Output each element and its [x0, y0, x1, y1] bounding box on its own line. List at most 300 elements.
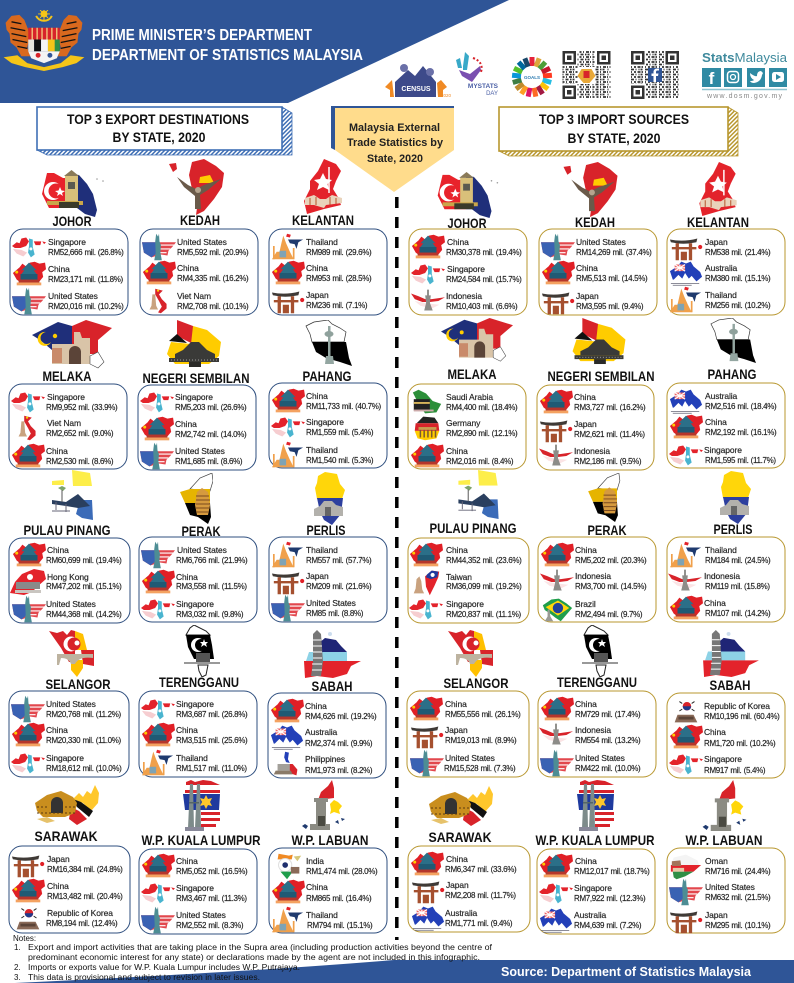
map: W.P. Kuala Lumpur import: [577, 780, 614, 831]
row: China: RM2,016 mil. (8.4%): [446, 457, 514, 466]
row: Indonesia: RM554 mil. (13.2%): [575, 736, 641, 745]
map: Pulau Pinang export: [52, 470, 93, 520]
row: China: RM44,352 mil. (23.6%): [446, 556, 522, 565]
row: China: [13, 543, 122, 566]
row: United States: RM632 mil. (21.5%): [705, 893, 771, 902]
row: China: [670, 596, 771, 619]
logo: MyStats Day: [456, 52, 499, 97]
row: Japan: RM295 mil. (10.1%): [705, 921, 771, 930]
panel: Kelantan imports: [667, 229, 785, 315]
row: China: RM23,171 mil. (11.8%): [48, 275, 124, 284]
map: Sabah export: [304, 630, 361, 678]
map: Melaka export: [32, 320, 112, 368]
panel: Sarawak exports: [9, 846, 130, 933]
row: Thailand: [272, 542, 372, 567]
state label: Sarawak import: SARAWAK: [428, 829, 492, 845]
state label: Perlis export: PERLIS: [306, 522, 346, 538]
map: Melaka import: [441, 318, 513, 361]
row: China: [410, 543, 522, 566]
row: China: [542, 261, 648, 284]
row: Singapore: Singapore: [175, 392, 213, 402]
row: Germany: Germany: [446, 418, 481, 428]
row: Australia: Australia: [705, 391, 738, 401]
row: Australia: [540, 909, 642, 932]
map: Selangor export: [49, 630, 94, 677]
row: China: China: [177, 263, 199, 273]
row: Japan: RM538 mil. (21.4%): [705, 248, 771, 257]
row: Singapore: [411, 264, 522, 284]
panel: Melaka imports: [408, 384, 526, 469]
row: United States: [12, 596, 122, 622]
row: China: [142, 854, 248, 877]
row: China: [670, 415, 777, 438]
row: China: China: [46, 725, 68, 735]
row: Thailand: [670, 287, 771, 312]
row: Japan: [542, 291, 644, 314]
panel: Negeri Sembilan imports: [537, 385, 654, 470]
row: Singapore: Singapore: [176, 883, 214, 893]
state label: Sarawak export: SARAWAK: [34, 828, 98, 844]
row: China: China: [704, 727, 726, 737]
row: Viet Nam: RM2,708 mil. (10.1%): [177, 302, 249, 311]
row: United States: RM5,592 mil. (20.9%): [177, 248, 249, 257]
row: Philippines: [274, 752, 373, 775]
row: Singapore: RM1,595 mil. (11.7%): [705, 456, 776, 465]
row: Oman: RM716 mil. (24.4%): [705, 867, 771, 876]
map: Kedah import: [563, 162, 618, 217]
map: W.P. Labuan import: [703, 780, 746, 831]
row: United States: United States: [306, 598, 356, 608]
panel: Perlis imports: [667, 537, 785, 622]
row: Singapore: Singapore: [447, 264, 485, 274]
state label: Pahang import: PAHANG: [708, 366, 757, 382]
row: Japan: RM3,595 mil. (9.4%): [576, 302, 644, 311]
row: Thailand: [142, 750, 247, 775]
row: United States: [410, 750, 516, 776]
row: Australia: Australia: [305, 727, 338, 737]
state label: Kelantan import: KELANTAN: [687, 214, 749, 230]
panel: Pahang imports: [667, 383, 785, 468]
state label: Kelantan export: KELANTAN: [292, 212, 354, 228]
row: United States: RM1,685 mil. (8.6%): [175, 457, 243, 466]
row: United States: [669, 879, 771, 905]
row: Japan: [412, 880, 516, 903]
row: Japan: RM16,384 mil. (24.8%): [47, 865, 123, 874]
row: Singapore: RM7,922 mil. (12.3%): [574, 894, 646, 903]
row: Singapore: Singapore: [306, 417, 344, 427]
row: Singapore: [140, 392, 247, 412]
row: Singapore: RM1,559 mil. (5.4%): [306, 428, 374, 437]
state label: Pulau Pinang export: PULAU PINANG: [24, 522, 111, 538]
row: Thailand: RM1,517 mil. (11.0%): [176, 764, 247, 773]
row: United States: United States: [46, 699, 96, 709]
row: China: RM2,530 mil. (8.6%): [46, 457, 114, 466]
notes block: This data is provisional and subject to revision in later issues.: [28, 973, 260, 982]
row: China: China: [446, 854, 468, 864]
row: Thailand: [272, 442, 374, 467]
row: China: China: [704, 598, 726, 608]
department heading: [92, 27, 363, 64]
row: United States: United States: [48, 291, 98, 301]
row: Viet Nam: [19, 416, 114, 440]
row: China: China: [575, 545, 597, 555]
StatsMalaysia social block: StatsMalaysia: [702, 50, 788, 65]
StatsMalaysia social block: f: [709, 69, 715, 88]
panel: Negeri Sembilan exports: [138, 385, 256, 470]
state label: Pulau Pinang import: PULAU PINANG: [430, 520, 517, 536]
logo: SDG wheel: GOALS: [524, 75, 540, 80]
row: United States: United States: [576, 237, 626, 247]
heading box: top 3 import sources: TOP 3 IMPORT SOURCES: [539, 111, 689, 127]
row: United States: United States: [445, 753, 495, 763]
row: United States: RM15,528 mil. (7.3%): [444, 764, 516, 773]
row: China: RM12,017 mil. (18.7%): [574, 867, 650, 876]
row: Australia: [670, 390, 777, 413]
map: Sarawak import: [429, 786, 493, 826]
row: Singapore: RM24,584 mil. (15.7%): [446, 275, 522, 284]
row: United States: United States: [46, 599, 96, 609]
map: Perlis export: [314, 472, 345, 525]
row: China: RM5,202 mil. (20.3%): [575, 556, 647, 565]
row: China: RM2,192 mil. (16.1%): [705, 428, 777, 437]
row: China: China: [306, 391, 328, 401]
map: Johor export: [42, 170, 104, 217]
row: Thailand: Thailand: [306, 237, 338, 247]
map: Kedah export: [169, 159, 224, 215]
row: Saudi Arabia: Saudi Arabia: [446, 392, 493, 402]
row: China: RM60,699 mil. (19.4%): [46, 556, 122, 565]
heading box: top 3 export destinations: BY STATE, 2020: [112, 129, 206, 145]
map: Perlis import: [720, 471, 751, 524]
panel: Kelantan exports: [269, 229, 387, 315]
row: China: China: [705, 417, 727, 427]
centre banner: report title: Malaysia External: [349, 122, 440, 134]
state label: Melaka export: MELAKA: [42, 368, 92, 384]
row: Japan: [272, 290, 368, 313]
panel: Sabah imports: [667, 693, 785, 778]
row: China: China: [47, 545, 69, 555]
logo: census 2020: [385, 64, 452, 98]
map: Perak import: [588, 473, 620, 522]
row: United States: United States: [177, 545, 227, 555]
row: United States: [271, 595, 364, 621]
centre banner: report title: [331, 106, 454, 192]
row: Singapore: [539, 883, 646, 903]
row: China: [541, 543, 647, 566]
row: Thailand: [272, 234, 372, 259]
row: Republic of Korea: Republic of Korea: [704, 701, 770, 711]
row: Viet Nam: RM2,652 mil. (9.0%): [46, 429, 114, 438]
logo: SDG wheel: [512, 57, 552, 97]
row: United States: [141, 542, 248, 568]
row: China: [12, 444, 114, 467]
row: Singapore: Singapore: [46, 753, 84, 763]
row: Singapore: [12, 237, 124, 257]
row: China: [540, 390, 646, 413]
row: Brazil: Brazil: [575, 599, 596, 609]
row: Singapore: [11, 753, 122, 773]
panel: Pulau Pinang exports: [9, 538, 130, 623]
row: China: [12, 879, 123, 902]
row: China: [12, 723, 122, 746]
state label: W.P. Kuala Lumpur export: W.P. KUALA LUMPUR: [142, 832, 260, 848]
department heading: PRIME MINISTER’S DEPARTMENT: [92, 27, 312, 44]
row: China: RM13,482 mil. (20.4%): [47, 892, 123, 901]
logo: census 2020: 2020: [441, 93, 452, 98]
row: Singapore: RM9,952 mil. (33.9%): [46, 403, 118, 412]
notes block: [13, 934, 493, 982]
row: Australia: RM2,516 mil. (18.4%): [705, 402, 777, 411]
row: Indonesia: RM3,700 mil. (14.5%): [575, 582, 647, 591]
row: United States: RM6,766 mil. (21.9%): [176, 556, 248, 565]
row: Japan: Japan: [574, 419, 597, 429]
row: Republic of Korea: RM8,194 mil. (12.4%): [46, 919, 118, 928]
row: Singapore: [11, 392, 118, 412]
row: Brazil: RM2,494 mil. (9.7%): [575, 610, 643, 619]
row: China: [272, 261, 372, 284]
state label: Selangor import: SELANGOR: [444, 675, 508, 691]
panel: Pulau Pinang imports: [408, 538, 529, 623]
row: United States: United States: [176, 910, 226, 920]
row: Australia: RM2,374 mil. (9.9%): [305, 739, 373, 748]
row: China: RM55,556 mil. (26.1%): [445, 710, 521, 719]
panel: Johor imports: [409, 229, 527, 315]
state label: Kedah export: KEDAH: [180, 212, 220, 228]
row: Thailand: Thailand: [306, 545, 338, 555]
row: Indonesia: [539, 445, 642, 466]
state label: Negeri Sembilan import: NEGERI SEMBILAN: [548, 368, 654, 384]
row: Thailand: RM184 mil. (24.5%): [705, 556, 771, 565]
row: Indonesia: Indonesia: [575, 725, 611, 735]
map: Pulau Pinang import: [458, 470, 499, 519]
row: China: China: [176, 856, 198, 866]
row: Singapore: RM5,203 mil. (26.6%): [175, 403, 247, 412]
row: Thailand: [670, 542, 771, 567]
row: China: RM6,347 mil. (33.6%): [445, 865, 517, 874]
row: Australia: Australia: [705, 263, 738, 273]
panel: Melaka exports: [9, 384, 127, 469]
row: Saudi Arabia: [413, 390, 518, 413]
row: Republic of Korea: [17, 907, 118, 929]
row: Singapore: Singapore: [47, 392, 85, 402]
header banner: [0, 0, 509, 103]
map: Kelantan import: [699, 162, 737, 216]
logo: MyStats Day: DAY: [486, 91, 498, 97]
row: United States: RM14,269 mil. (37.4%): [576, 248, 652, 257]
notes block: predominant economic interest for any state) or declarations made by the agent are not included in this infographic.: [28, 953, 480, 962]
row: Thailand: [272, 907, 373, 932]
row: Republic of Korea: Republic of Korea: [47, 908, 113, 918]
row: Japan: Japan: [576, 291, 599, 301]
row: Thailand: RM256 mil. (10.2%): [705, 301, 771, 310]
row: Japan: Japan: [705, 237, 728, 247]
map: Pahang export: [306, 320, 352, 366]
row: China: China: [305, 701, 327, 711]
row: China: China: [306, 882, 328, 892]
row: China: RM953 mil. (28.5%): [306, 274, 372, 283]
row: China: RM30,378 mil. (19.4%): [446, 248, 522, 257]
panel: Selangor exports: [9, 691, 129, 777]
heading box: top 3 export destinations: TOP 3 EXPORT DESTINATIONS: [67, 111, 249, 127]
row: China: [411, 852, 517, 875]
row: Japan: [12, 854, 123, 877]
row: Thailand: Thailand: [306, 910, 338, 920]
row: China: China: [576, 263, 598, 273]
source line: Source: Department of Statistics Malaysia: [501, 965, 752, 979]
row: United States: [142, 234, 249, 260]
row: United States: United States: [175, 446, 225, 456]
row: China: RM3,727 mil. (16.2%): [574, 403, 646, 412]
panel: Perak exports: [139, 537, 257, 622]
state label: Terengganu import: TERENGGANU: [557, 674, 637, 690]
panel: Kedah imports: [539, 229, 657, 315]
row: Taiwan: Taiwan: [446, 572, 472, 582]
row: China: [271, 699, 377, 722]
row: Indonesia: Indonesia: [574, 446, 610, 456]
row: China: China: [575, 856, 597, 866]
row: United States: RM20,768 mil. (11.2%): [46, 710, 122, 719]
row: United States: [12, 288, 124, 314]
row: China: China: [306, 263, 328, 273]
row: India: [278, 854, 378, 879]
row: Singapore: RM20,837 mil. (11.1%): [446, 610, 522, 619]
row: Australia: RM4,639 mil. (7.2%): [574, 921, 642, 930]
map: W.P. Kuala Lumpur export: [183, 780, 220, 831]
heading box: top 3 import sources: BY STATE, 2020: [568, 130, 661, 146]
row: Indonesia: Indonesia: [704, 571, 740, 581]
map: Terengganu export: [184, 625, 220, 677]
state label: Terengganu export: TERENGGANU: [159, 674, 239, 690]
row: United States: RM44,368 mil. (14.2%): [46, 610, 122, 619]
row: China: China: [46, 446, 68, 456]
row: China: [412, 235, 522, 258]
logo: census 2020: CENSUS: [401, 86, 431, 93]
row: Philippines: RM1,973 mil. (8.2%): [305, 766, 373, 775]
notes block: Export and import activities that are taking place in the Supra area (including production activities beyond the centre of: [28, 943, 493, 952]
row: China: [142, 723, 248, 746]
row: Hong Kong: Hong Kong: [47, 572, 89, 582]
map: Negeri Sembilan import: [573, 318, 625, 364]
row: Japan: [411, 725, 517, 748]
row: Australia: Australia: [574, 910, 607, 920]
row: China: China: [446, 446, 468, 456]
row: China: [541, 697, 641, 720]
row: China: [13, 262, 124, 285]
map: Johor import: [438, 172, 498, 218]
row: Singapore: [141, 699, 248, 719]
panel: Johor exports: [10, 229, 128, 315]
row: United States: RM20,016 mil. (10.2%): [48, 302, 124, 311]
row: Thailand: RM989 mil. (29.6%): [306, 248, 372, 257]
state label: Sabah export: SABAH: [312, 678, 352, 694]
row: China: [410, 697, 521, 720]
row: Singapore: RM3,467 mil. (11.3%): [176, 894, 247, 903]
row: Singapore: [409, 599, 522, 619]
row: Singapore: RM18,612 mil. (10.0%): [46, 764, 122, 773]
state label: Negeri Sembilan export: NEGERI SEMBILAN: [142, 370, 250, 386]
row: China: RM4,626 mil. (19.2%): [305, 712, 377, 721]
row: Viet Nam: Viet Nam: [177, 291, 211, 301]
row: Thailand: RM557 mil. (57.7%): [306, 556, 372, 565]
row: China: [143, 261, 249, 284]
row: China: RM20,330 mil. (11.0%): [46, 736, 122, 745]
row: United States: [141, 907, 244, 933]
heading box: top 3 export destinations: [37, 107, 292, 155]
heading box: top 3 import sources: [499, 107, 738, 156]
row: China: China: [574, 392, 596, 402]
row: Germany: RM2,890 mil. (12.1%): [446, 429, 518, 438]
row: China: [142, 570, 247, 593]
state label: Perak import: PERAK: [588, 522, 626, 538]
footer band: [15, 960, 794, 983]
state label: W.P. Labuan export: W.P. LABUAN: [292, 832, 368, 848]
state label: Perak export: PERAK: [182, 523, 220, 539]
row: Indonesia: [539, 724, 641, 745]
centre banner: report title: Trade Statistics by: [347, 137, 444, 149]
row: United States: RM2,552 mil. (8.3%): [176, 921, 244, 930]
row: Thailand: Thailand: [705, 290, 737, 300]
row: Japan: Japan: [705, 910, 728, 920]
map: Selangor import: [448, 630, 493, 677]
row: Indonesia: [540, 570, 647, 591]
StatsMalaysia social block: www.dosm.gov.my: [706, 93, 782, 100]
logo: MyStats Day: MYSTATS: [468, 83, 499, 90]
row: Singapore: [669, 754, 766, 775]
row: Thailand: Thailand: [176, 753, 208, 763]
row: Singapore: RM52,666 mil. (26.8%): [48, 248, 124, 257]
row: Indonesia: [668, 570, 770, 591]
row: China: China: [446, 545, 468, 555]
row: Singapore: [669, 445, 776, 465]
row: Australia: Australia: [445, 908, 478, 918]
QR code: facebook: [631, 51, 679, 99]
QR code: website: [562, 51, 610, 99]
row: China: [272, 389, 382, 412]
row: China: RM5,513 mil. (14.5%): [576, 274, 648, 283]
map: Sabah import: [703, 630, 759, 677]
notes block: Notes:: [13, 934, 36, 943]
row: Thailand: RM1,540 mil. (5.3%): [306, 456, 374, 465]
map: Sarawak export: [35, 785, 99, 825]
row: China: China: [575, 699, 597, 709]
notes block: Imports or exports value for W.P. Kuala Lumpur includes W.P. Putrajaya.: [28, 963, 300, 972]
row: Japan: Japan: [445, 725, 468, 735]
notes block: 2.: [14, 963, 21, 972]
row: United States: United States: [575, 753, 625, 763]
row: China: China: [176, 725, 198, 735]
row: Taiwan: RM36,099 mil. (19.2%): [446, 582, 522, 591]
map: Pahang import: [711, 318, 756, 363]
row: China: China: [445, 699, 467, 709]
row: Japan: RM236 mil. (7.1%): [306, 301, 368, 310]
row: Singapore: RM3,032 mil. (9.8%): [176, 610, 244, 619]
notes block: 1.: [14, 943, 21, 952]
row: China: China: [47, 881, 69, 891]
panel: Terengganu exports: [139, 691, 257, 777]
state label: Melaka import: MELAKA: [448, 366, 496, 382]
row: Indonesia: Indonesia: [446, 291, 482, 301]
row: Hong Kong: [10, 569, 122, 595]
state label: Pahang export: PAHANG: [302, 368, 352, 384]
state label: W.P. Kuala Lumpur import: W.P. KUALA LUMPUR: [536, 832, 654, 848]
row: Australia: [271, 726, 373, 749]
map: Negeri Sembilan export: [167, 320, 221, 367]
row: China: RM11,733 mil. (40.7%): [306, 402, 382, 411]
row: Thailand: Thailand: [306, 445, 338, 455]
row: United States: [11, 696, 122, 722]
row: China: China: [176, 572, 198, 582]
state label: Johor import: JOHOR: [448, 215, 486, 231]
